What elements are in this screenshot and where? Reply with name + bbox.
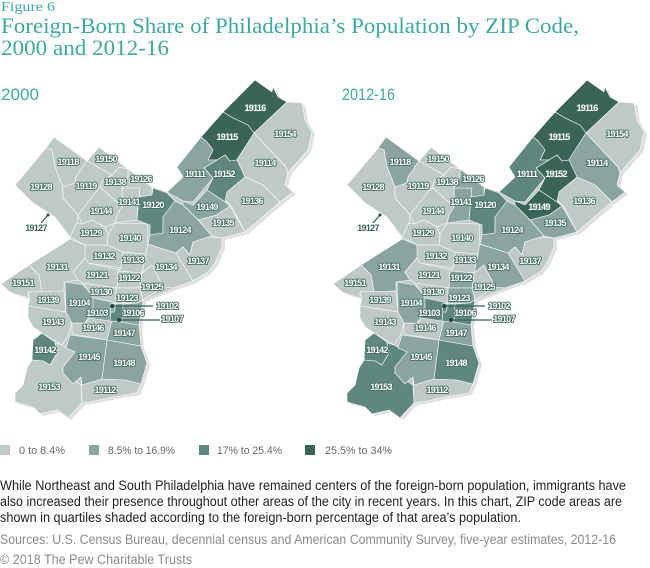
ZIP code labels: 19119 <box>407 181 429 191</box>
heading: 2000: 2000 <box>1 85 39 104</box>
title: Foreign-Born Share of Philadelphia’s Population by ZIP Code, <box>1 13 579 38</box>
ZIP code labels: 19103 <box>86 308 108 318</box>
ZIP code labels: 19121 <box>418 270 440 280</box>
ZIP code labels: 19145 <box>78 352 100 362</box>
ZIP code labels: 19134 <box>155 262 177 272</box>
ZIP code labels: 19123 <box>116 293 138 303</box>
ZIP code labels: 19143 <box>374 317 396 327</box>
heading: 2012-16: 2012-16 <box>342 85 395 104</box>
ZIP code labels: 19132 <box>93 251 115 261</box>
ZIP code labels: 19135 <box>212 218 234 228</box>
ZIP code labels: 19133 <box>122 255 144 265</box>
map: 2000 <box>1 80 312 418</box>
ZIP code labels: 19145 <box>410 352 432 362</box>
legend: 8.5% to 16.9% <box>108 445 175 457</box>
ZIP code labels: 19152 <box>213 169 235 179</box>
ZIP code labels: 19104 <box>68 298 90 308</box>
ZIP code labels: 19126 <box>462 174 484 184</box>
legend: 0 to 8.4% <box>19 445 65 457</box>
ZIP code labels: 19140 <box>119 233 141 243</box>
ZIP code labels: 19112 <box>94 385 116 395</box>
legend: 25.5% to 34% <box>325 445 392 457</box>
ZIP code labels: 19131 <box>378 262 400 272</box>
ZIP code labels: 19102 <box>488 301 510 311</box>
figure label: Figure 6 <box>1 0 55 15</box>
title <box>1 13 579 60</box>
ZIP code labels: 19147 <box>445 328 467 338</box>
ZIP code labels: 19146 <box>82 323 104 333</box>
ZIP code labels: 19134 <box>487 262 509 272</box>
ZIP code labels: 19149 <box>196 202 218 212</box>
ZIP leader lines <box>373 214 492 322</box>
ZIP code labels: 19150 <box>95 154 117 164</box>
ZIP code labels: 19120 <box>474 200 496 210</box>
ZIP code labels: 19124 <box>169 225 191 235</box>
ZIP code labels: 19121 <box>86 270 108 280</box>
ZIP code labels: 19120 <box>142 200 164 210</box>
ZIP code labels: 19106 <box>454 308 476 318</box>
ZIP code labels: 19149 <box>528 202 550 212</box>
ZIP code labels: 19115 <box>548 132 570 142</box>
ZIP code labels: 19148 <box>113 358 135 368</box>
ZIP code labels: 19152 <box>545 169 567 179</box>
map: 2012-16 <box>333 80 644 418</box>
description text: also increased their presence throughout other areas of the city in recent years. In this chart, ZIP code areas are <box>0 494 622 509</box>
description text: While Northeast and South Philadelphia have remained centers of the foreign-born population, immigrants have <box>0 478 626 493</box>
ZIP code labels: 19123 <box>448 293 470 303</box>
ZIP code labels: 19132 <box>425 251 447 261</box>
ZIP code labels: 19118 <box>389 157 411 167</box>
ZIP code labels: 19111 <box>185 169 206 179</box>
ZIP code labels: 19139 <box>37 295 59 305</box>
copyright: © 2018 The Pew Charitable Trusts <box>0 552 192 567</box>
ZIP code labels: 19116 <box>576 103 598 113</box>
ZIP code labels <box>12 103 296 395</box>
ZIP code labels: 19137 <box>519 256 541 266</box>
ZIP code labels: 19115 <box>216 132 238 142</box>
ZIP code labels: 19133 <box>454 255 476 265</box>
ZIP code labels: 19150 <box>427 154 449 164</box>
ZIP code labels: 19138 <box>104 177 126 187</box>
ZIP code labels: 19138 <box>436 177 458 187</box>
ZIP code labels: 19122 <box>118 273 140 283</box>
ZIP code labels: 19112 <box>426 385 448 395</box>
ZIP code labels: 19154 <box>274 129 296 139</box>
ZIP code labels: 19151 <box>12 278 34 288</box>
title: 2000 and 2012-16 <box>1 35 169 60</box>
ZIP code labels: 19102 <box>156 301 178 311</box>
ZIP code labels: 19116 <box>244 103 266 113</box>
ZIP code labels: 19118 <box>57 157 79 167</box>
ZIP code labels: 19119 <box>75 181 97 191</box>
ZIP code labels: 19125 <box>141 282 163 292</box>
ZIP code labels: 19147 <box>113 328 135 338</box>
legend <box>0 445 392 457</box>
ZIP code labels: 19144 <box>90 206 112 216</box>
ZIP code labels: 19136 <box>573 196 595 206</box>
ZIP code labels: 19106 <box>122 308 144 318</box>
ZIP code labels: 19130 <box>422 287 444 297</box>
ZIP code labels: 19135 <box>544 218 566 228</box>
ZIP code labels: 19128 <box>30 182 52 192</box>
ZIP code labels: 19143 <box>42 317 64 327</box>
ZIP code labels: 19144 <box>422 206 444 216</box>
ZIP code labels: 19131 <box>46 262 68 272</box>
ZIP code labels: 19142 <box>34 345 56 355</box>
ZIP code labels: 19104 <box>400 298 422 308</box>
description text: shown in quartiles shaded according to the foreign-born percentage of that area’s population. <box>0 510 521 525</box>
ZIP code labels: 19125 <box>473 282 495 292</box>
ZIP code labels: 19107 <box>161 314 183 324</box>
ZIP code labels: 19153 <box>370 382 392 392</box>
ZIP code labels: 19151 <box>344 278 366 288</box>
ZIP code labels: 19124 <box>501 225 523 235</box>
ZIP code labels: 19127 <box>357 223 379 233</box>
ZIP code labels: 19122 <box>450 273 472 283</box>
ZIP code labels: 19137 <box>187 256 209 266</box>
ZIP leader lines <box>41 214 160 322</box>
ZIP code labels: 19107 <box>493 314 515 324</box>
ZIP code labels: 19146 <box>414 323 436 333</box>
ZIP code labels: 19127 <box>25 223 47 233</box>
ZIP code labels: 19148 <box>445 358 467 368</box>
ZIP code labels: 19111 <box>517 169 538 179</box>
ZIP code labels: 19128 <box>362 182 384 192</box>
ZIP code labels: 19130 <box>90 287 112 297</box>
legend: 17% to 25.4% <box>217 445 282 457</box>
ZIP code labels <box>344 103 628 395</box>
ZIP code labels: 19136 <box>241 196 263 206</box>
ZIP code labels: 19114 <box>586 158 608 168</box>
ZIP code labels: 19129 <box>80 228 102 238</box>
ZIP code labels: 19153 <box>38 382 60 392</box>
ZIP code labels: 19114 <box>254 158 276 168</box>
ZIP code labels: 19129 <box>412 228 434 238</box>
ZIP code labels: 19103 <box>418 308 440 318</box>
ZIP code labels: 19139 <box>369 295 391 305</box>
ZIP code labels: 19126 <box>130 174 152 184</box>
ZIP code labels: 19141 <box>450 197 472 207</box>
description text <box>0 478 626 525</box>
ZIP code labels: 19141 <box>118 197 140 207</box>
ZIP code labels: 19154 <box>606 129 628 139</box>
ZIP code labels: 19142 <box>366 345 388 355</box>
ZIP code labels: 19140 <box>451 233 473 243</box>
